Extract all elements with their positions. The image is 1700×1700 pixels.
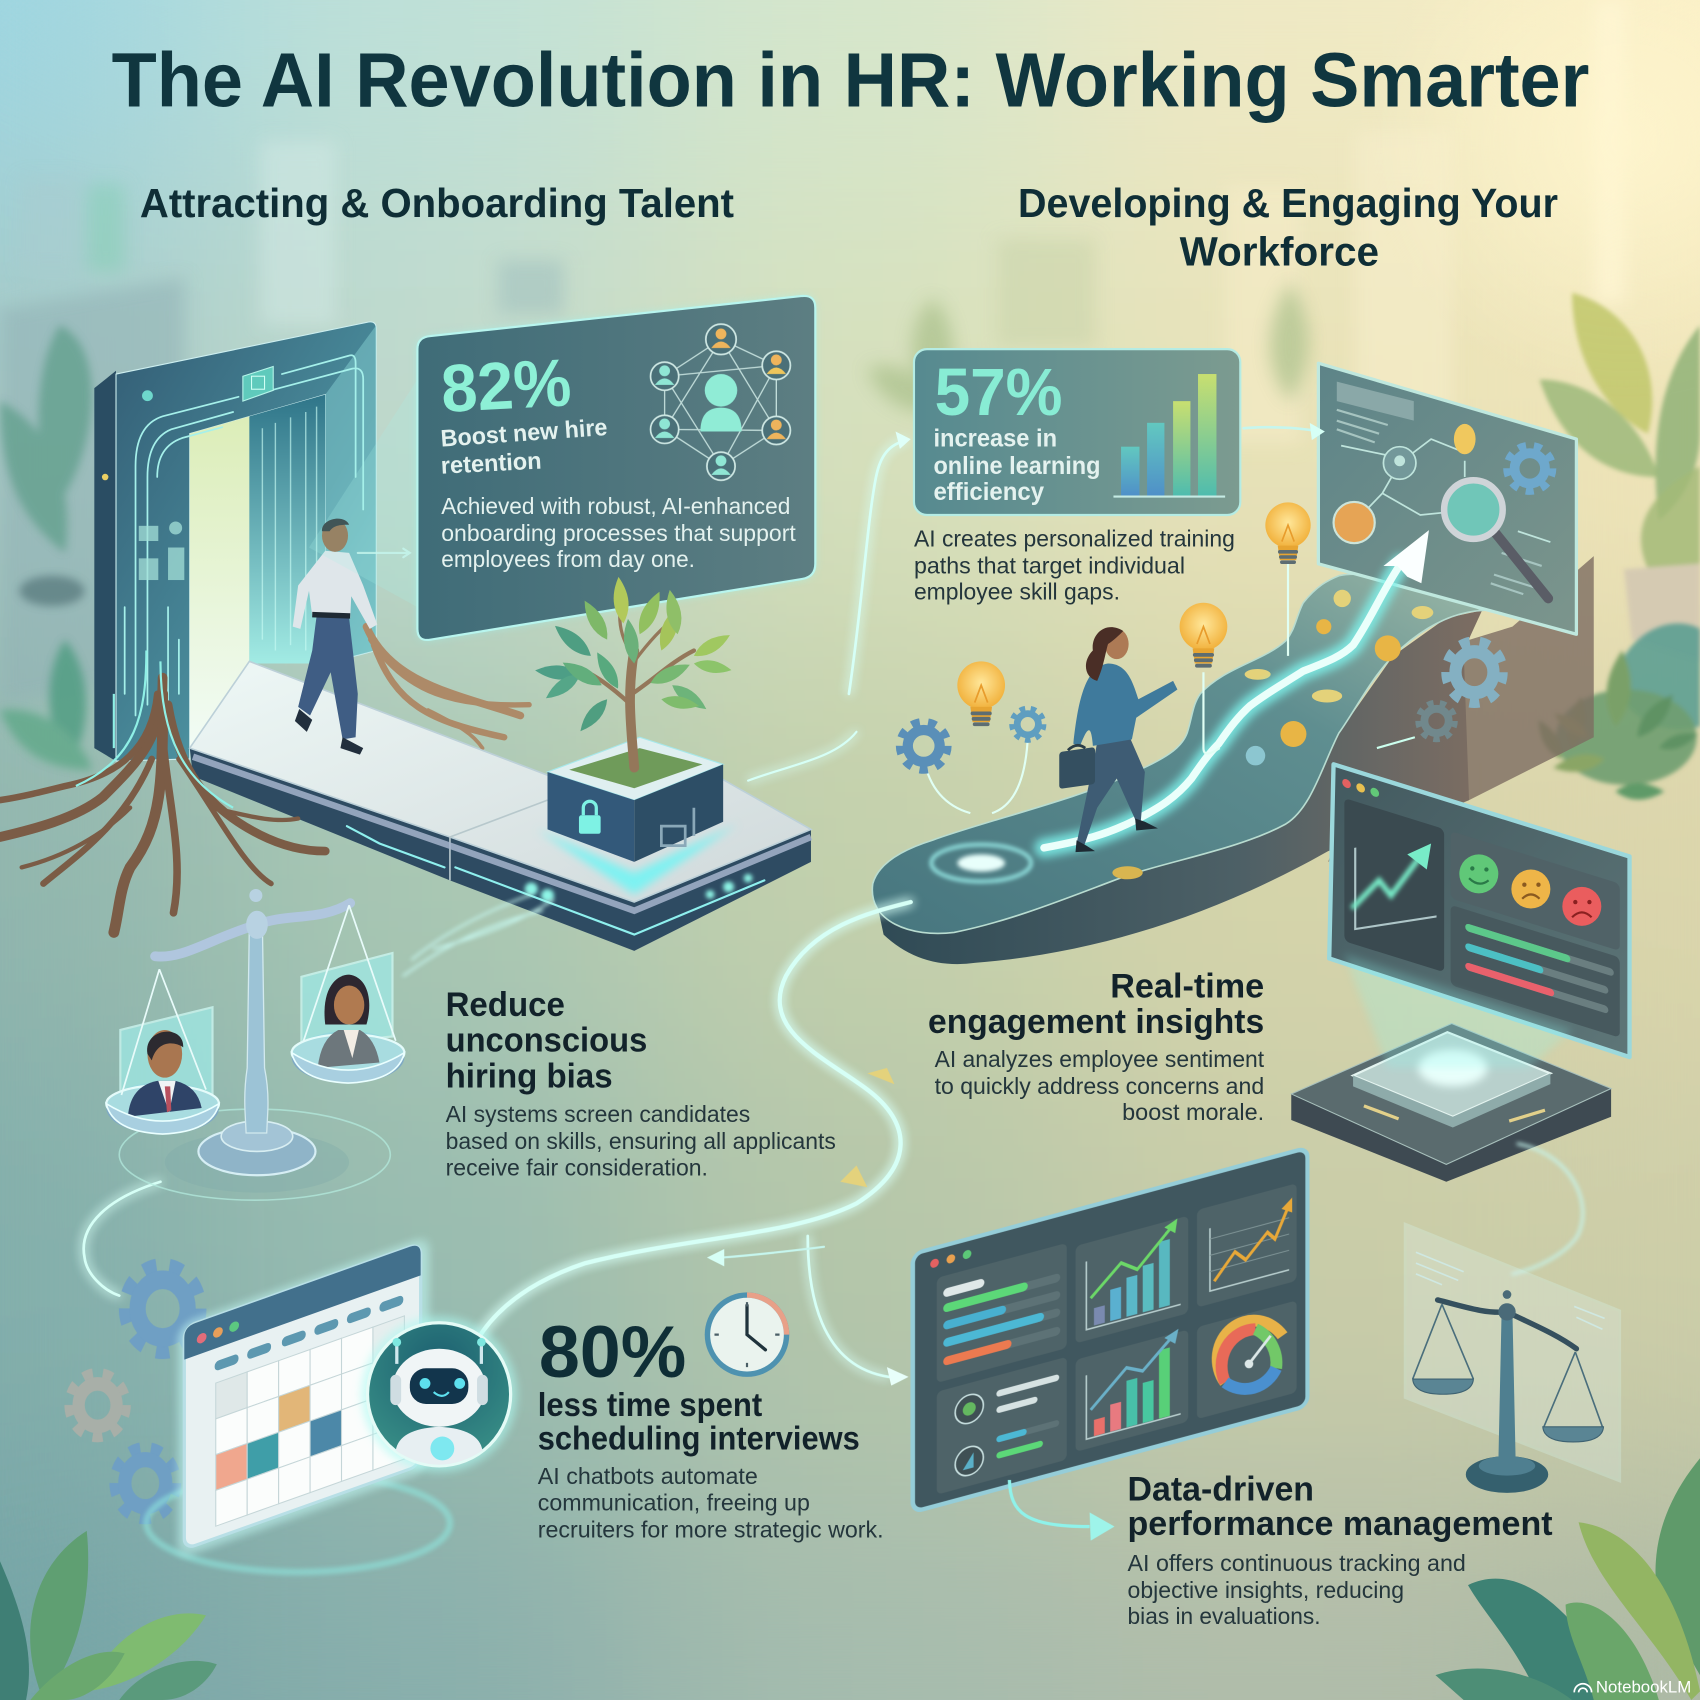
stat: 80% less time spent: 80% — [539, 1310, 686, 1393]
icon: people network — [651, 324, 790, 480]
foreground leaves, bottom left — [0, 1531, 217, 1700]
performance dashboard — [913, 1148, 1308, 1512]
horizontal bars — [948, 1263, 1056, 1469]
body text: employees from day one. — [441, 546, 695, 572]
NotebookLM watermark: NotebookLM — [1596, 1677, 1691, 1696]
learning screen with magnifier — [1318, 363, 1576, 634]
subheading — [933, 425, 1100, 506]
lightbulbs and gears along the path — [901, 502, 1502, 813]
icon: happy face — [1459, 854, 1498, 893]
title: The AI Revolution in HR: Working Smarter — [112, 37, 1589, 123]
transparent card with balance scale — [1405, 1224, 1620, 1493]
chart: line trend orange — [1210, 1197, 1292, 1291]
subheading: efficiency — [933, 478, 1044, 506]
subheading: Boost new hire — [440, 414, 608, 453]
text: real-time engagement insights: AI analyzes employee sentiment — [935, 1046, 1265, 1072]
bar chart — [1113, 374, 1225, 497]
icon: balance scale with candidates — [106, 889, 404, 1200]
body text — [441, 493, 796, 572]
icon: lightbulb on screen — [1454, 424, 1476, 454]
circuit chip icon — [243, 366, 273, 401]
text: personalized training: AI creates personalized training — [914, 525, 1235, 551]
text: data-driven performance management — [1128, 1471, 1553, 1629]
text: reduce unconscious hiring bias: hiring bias — [446, 1057, 613, 1095]
stat: 80% less time spent: communication, freeing up — [538, 1489, 810, 1515]
doorway interior light and screen — [190, 325, 376, 750]
text: reduce unconscious hiring bias: Reduce — [446, 986, 565, 1024]
icon: clock — [705, 1292, 789, 1377]
icon: gear on screen — [1508, 447, 1551, 490]
stand behind tilted screen — [1328, 556, 1594, 862]
text: real-time engagement insights: engagement insights — [928, 1003, 1264, 1041]
body text: Achieved with robust, AI-enhanced — [441, 493, 790, 519]
chart: bars with trend 1 — [1086, 1218, 1181, 1330]
text: personalized training — [914, 525, 1235, 605]
sentiment dashboard screen — [1329, 764, 1630, 1057]
glowing growth arrow — [1044, 530, 1429, 848]
stat: 80% less time spent: recruiters for more strategic work. — [538, 1516, 884, 1542]
text: real-time engagement insights: to quickly address concerns and — [935, 1073, 1264, 1099]
robot assistant badge — [361, 1316, 517, 1472]
stat 57%: 57% — [935, 355, 1062, 430]
stat: 80% less time spent: less time spent — [538, 1387, 762, 1424]
briefcase — [1059, 745, 1095, 789]
subheading — [440, 414, 608, 480]
stat: 80% less time spent: scheduling interviews — [538, 1421, 860, 1458]
small arrow from man to panel — [358, 549, 410, 557]
projection beam from portal — [309, 379, 417, 607]
glowing flow line winding through center — [84, 894, 1583, 1386]
roots behind walking man — [366, 627, 529, 748]
icon: magnifying glass — [1444, 480, 1548, 598]
winding growth path ribbon — [872, 574, 1482, 964]
foreground leaves, bottom right — [1435, 1458, 1700, 1700]
left pan with male candidate card — [106, 969, 219, 1134]
heading: developing and engaging your workforce — [1018, 180, 1558, 275]
text: personalized training: employee skill gaps. — [914, 579, 1120, 605]
stat 82%: 82% — [439, 345, 573, 427]
icon: neutral face — [1511, 870, 1550, 909]
subheading: retention — [440, 448, 542, 480]
text: reduce unconscious hiring bias — [446, 986, 836, 1180]
platform walkway and base block — [190, 661, 811, 951]
icon: padlock — [579, 801, 601, 834]
panel: 82% new hire retention — [417, 296, 815, 640]
stat: 80% less time spent: AI chatbots automate — [538, 1463, 758, 1489]
text: personalized training: paths that target individual — [914, 553, 1185, 579]
text: real-time engagement insights: boost morale. — [1122, 1099, 1264, 1125]
arrow to learning screen — [1244, 423, 1325, 440]
tree in secure box — [534, 576, 737, 894]
leaves — [534, 576, 733, 735]
text: reduce unconscious hiring bias: based on skills, ensuring all applicants — [446, 1128, 836, 1154]
heading: developing and engaging your workforce: Workforce — [1180, 229, 1379, 275]
calendar ring base — [146, 1474, 450, 1572]
horizontal sentiment bars — [1469, 928, 1610, 1011]
text: data-driven performance management: objective insights, reducing — [1128, 1577, 1404, 1603]
icon: sad face — [1562, 887, 1601, 926]
panel: 57% online learning efficiency — [914, 349, 1240, 515]
text: reduce unconscious hiring bias: receive fair consideration. — [446, 1154, 708, 1180]
calendar window — [178, 1235, 429, 1559]
tree trunk and branches — [575, 607, 694, 768]
subheading: increase in — [933, 425, 1057, 453]
main roots with glowing circuit traces — [0, 651, 325, 932]
text: data-driven performance management: AI offers continuous tracking and — [1128, 1550, 1466, 1576]
walking man — [293, 519, 377, 755]
icon: scale — [1413, 1290, 1604, 1493]
portal: glowing doorway with circuits — [94, 322, 376, 761]
dashboard base with glowing plate — [1291, 954, 1611, 1182]
background plants, blurred — [0, 282, 1700, 800]
text: data-driven performance management: performance management — [1128, 1505, 1553, 1543]
stat: 80% less time spent — [538, 1292, 884, 1542]
subheading: online learning — [933, 452, 1100, 480]
glow under box — [537, 824, 737, 894]
walking woman with briefcase — [1059, 627, 1177, 852]
chart: bars with trend 2 — [1086, 1328, 1181, 1439]
text: data-driven performance management: Data-driven — [1128, 1471, 1314, 1509]
text: data-driven performance management: bias in evaluations. — [1128, 1603, 1321, 1629]
text: real-time engagement insights — [928, 967, 1265, 1125]
line chart — [1355, 835, 1437, 929]
heading: developing and engaging your workforce: Developing & Engaging Your — [1018, 180, 1558, 226]
text: reduce unconscious hiring bias: AI systems screen candidates — [446, 1101, 750, 1127]
body text: onboarding processes that support — [441, 520, 796, 546]
gauge on dashboard — [1218, 1321, 1283, 1389]
right pan with female candidate card — [292, 905, 404, 1083]
glowing connector from platform up to second panel — [748, 432, 911, 781]
text: reduce unconscious hiring bias: unconscious — [446, 1022, 647, 1060]
text: real-time engagement insights: Real-time — [1110, 967, 1264, 1005]
gears beside calendar — [70, 1267, 198, 1517]
arrow from dashboard to text — [1009, 1480, 1115, 1541]
heading: attracting and onboarding talent: Attracting & Onboarding Talent — [140, 180, 734, 226]
